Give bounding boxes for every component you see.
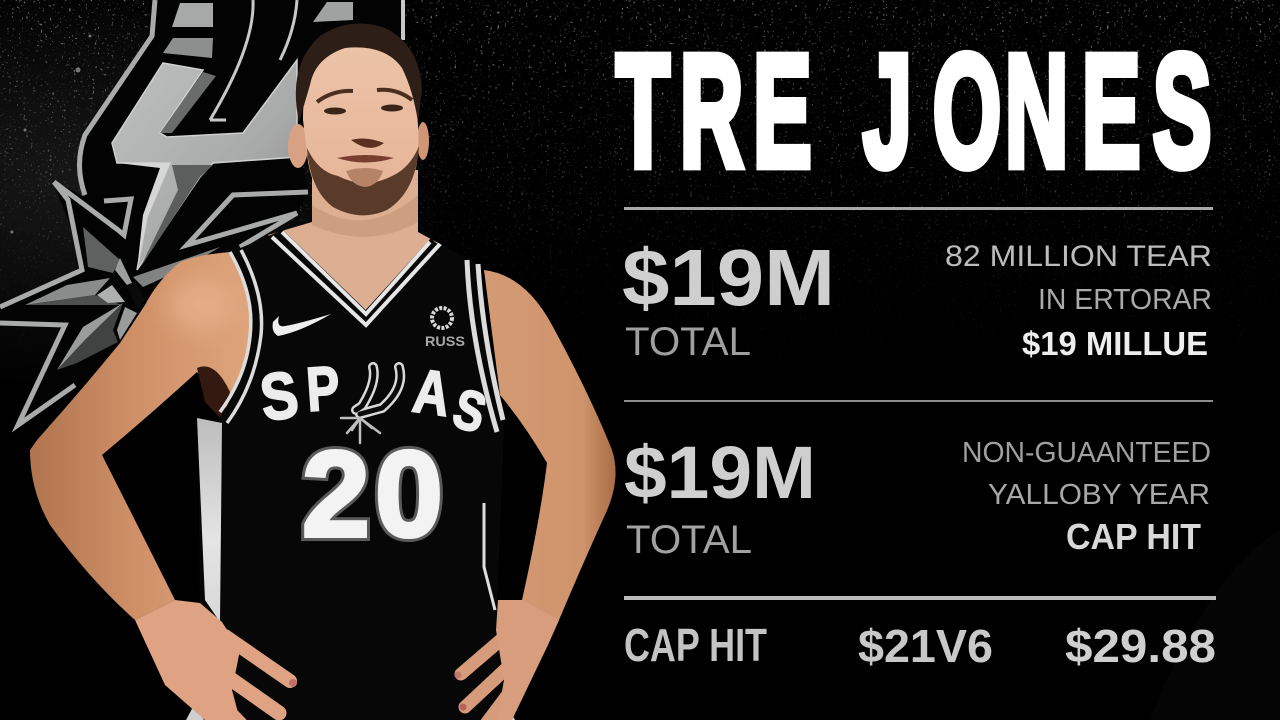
text block: guarantee details: YALLOBY YEAR	[988, 479, 1210, 511]
player neck and chest	[268, 170, 442, 328]
jersey wordmark: S	[256, 356, 303, 435]
player right hand	[454, 600, 559, 720]
stat: $19M total: $19M	[624, 431, 816, 514]
eyebrows	[317, 91, 353, 102]
text block: contract details: $19 MILLUE	[1022, 325, 1208, 362]
eyes	[324, 108, 346, 114]
title: JONES	[863, 22, 1211, 201]
logo upper silver bars	[163, 2, 353, 58]
logo black body	[0, 0, 405, 433]
shoulder highlight	[168, 279, 232, 331]
background	[0, 0, 1280, 352]
stat: $19M total: $19M	[622, 233, 835, 322]
mouth	[337, 155, 394, 162]
jersey collar trim	[272, 232, 440, 325]
icon: spurs team logo	[0, 0, 405, 433]
divider lines	[624, 207, 1216, 600]
logo dark shading under lightning	[117, 163, 170, 270]
jersey number 20: 20	[302, 426, 443, 562]
logo outer silver outline	[0, 0, 308, 425]
icon: sponsor patch	[425, 308, 465, 349]
player head	[288, 24, 429, 215]
panel: first contract stat	[622, 233, 1212, 364]
player right arm	[484, 270, 616, 647]
logo star facets	[25, 227, 220, 370]
stat: second cap hit value: $29.88	[1065, 620, 1216, 672]
text block: guarantee details	[962, 437, 1211, 557]
title: TRE	[616, 22, 812, 201]
icon: swoosh	[273, 314, 331, 336]
jersey number 20: 20	[302, 426, 443, 562]
logo thin curved highlights	[210, 0, 403, 120]
jersey left armhole trim	[220, 250, 262, 423]
ears	[288, 124, 308, 168]
player left hand	[135, 600, 297, 720]
icon: jersey spur	[341, 367, 400, 443]
panel: second contract stat	[624, 431, 1211, 562]
icon: sponsor patch: RUSS	[425, 333, 465, 349]
text block: contract details: IN ERTORAR	[1038, 284, 1212, 316]
label: total: TOTAL	[625, 320, 751, 364]
hair	[296, 24, 422, 122]
logo silver lightning shape	[112, 60, 297, 270]
jersey wordmark: S	[447, 376, 493, 445]
stat: first cap hit value: $21V6	[858, 620, 993, 672]
label: total: TOTAL	[626, 518, 752, 562]
beard	[307, 146, 419, 215]
text block: contract details: 82 MILLION TEAR	[945, 240, 1212, 273]
armpit shadow	[197, 366, 230, 420]
player photo illustration	[30, 24, 616, 720]
jersey side panel	[197, 418, 222, 622]
jersey	[186, 231, 515, 720]
jersey wordmark: P	[304, 354, 342, 425]
nose	[351, 139, 384, 148]
label: cap hit: CAP HIT	[624, 619, 767, 671]
jersey wordmark: A	[409, 357, 454, 430]
face	[303, 46, 418, 215]
jersey right armhole trim	[467, 260, 503, 432]
jersey wordmark	[256, 354, 493, 445]
panel: cap hit row	[624, 619, 1216, 672]
title	[616, 22, 1211, 201]
text block: contract details	[945, 240, 1212, 362]
text block: guarantee details: NON-GUAANTEED	[962, 437, 1211, 469]
text block: guarantee details: CAP HIT	[1066, 516, 1201, 557]
player left arm	[30, 252, 262, 620]
